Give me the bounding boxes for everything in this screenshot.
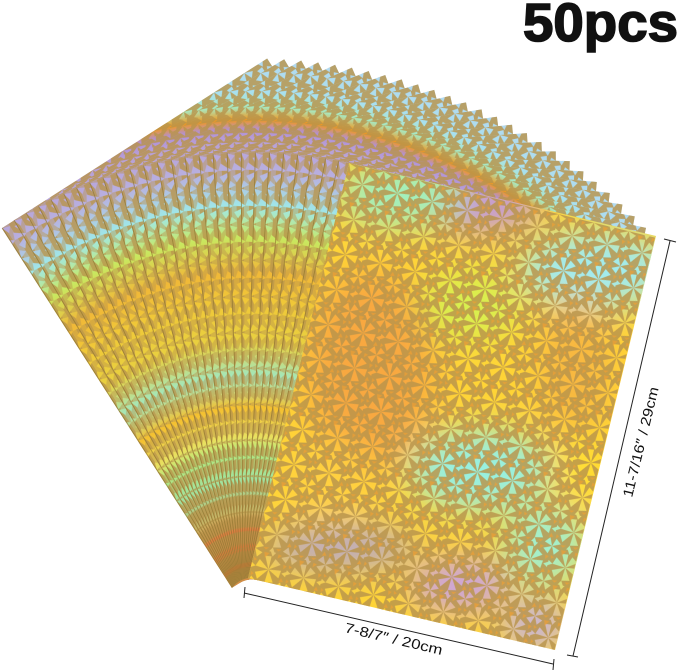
height label: 11-7/16″ / 29cm (619, 385, 662, 499)
height dimension line (567, 239, 676, 657)
top holographic sheet (248, 163, 656, 650)
width label: 7-8/7″ / 20cm (343, 619, 444, 658)
width dimension line (244, 587, 554, 670)
